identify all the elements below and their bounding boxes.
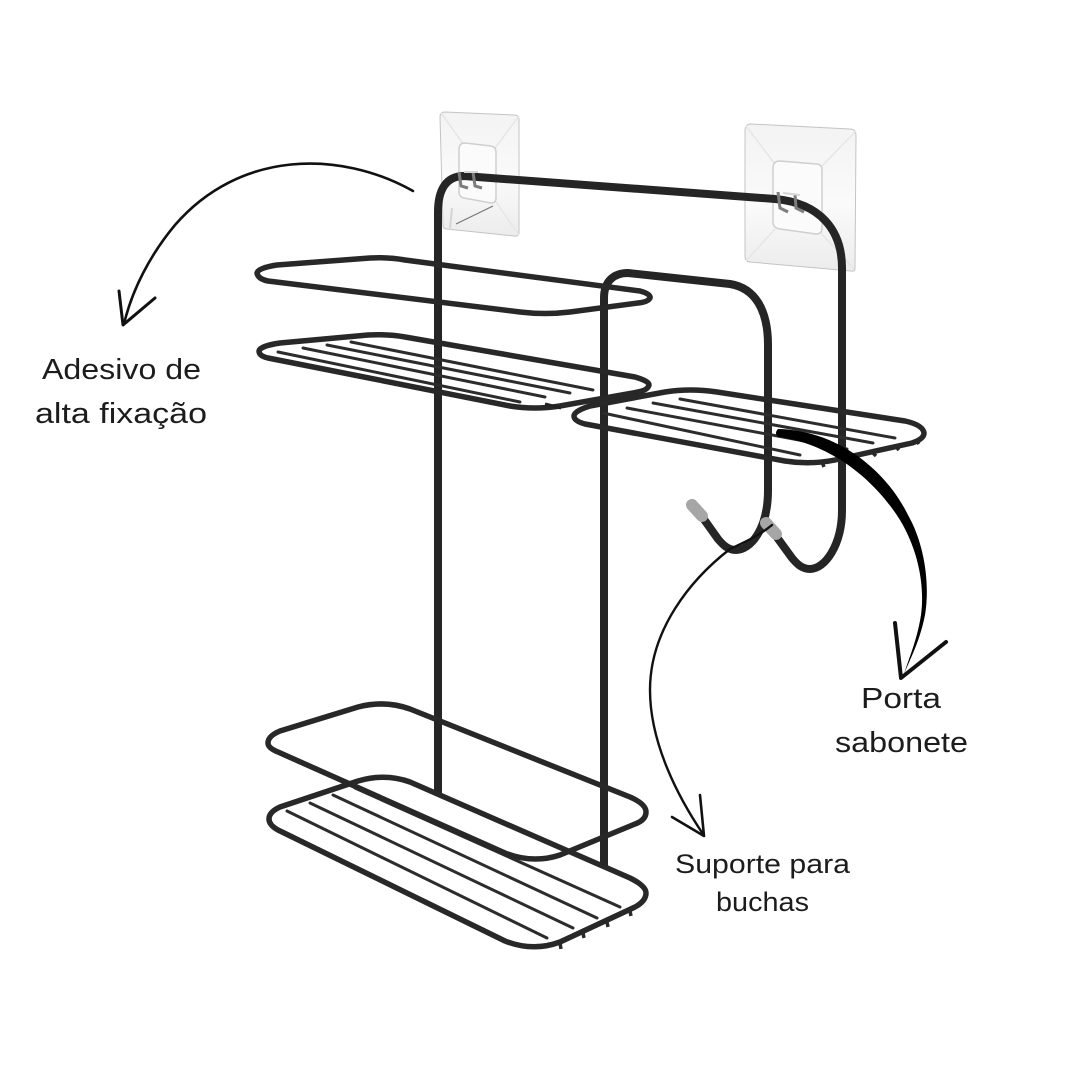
top shelf base frame xyxy=(259,335,649,408)
label: sponge hooks: buchas xyxy=(716,887,809,917)
label: adhesive: alta fixação xyxy=(35,398,207,430)
soap dish wire bars xyxy=(603,399,919,467)
bottom shelf wire bars xyxy=(287,788,631,949)
top shelf wire bars xyxy=(278,342,593,402)
adhesive pad left xyxy=(440,112,519,236)
adhesive pad right xyxy=(745,124,856,271)
soap dish frame xyxy=(574,390,924,463)
label: soap dish: sabonete xyxy=(835,727,968,759)
arrow: adhesive xyxy=(119,164,413,325)
clips on crossbar xyxy=(459,172,804,212)
bottom shelf upper frame xyxy=(268,704,646,859)
label: adhesive: Adesivo de xyxy=(42,354,201,386)
bottom shelf base frame xyxy=(269,777,646,947)
left upright rod with top crossbar and right hook xyxy=(438,176,842,795)
arrow: soap dish xyxy=(776,429,946,678)
top shelf frame xyxy=(257,258,650,314)
hook tips xyxy=(692,505,776,534)
label: soap dish: Porta xyxy=(861,683,942,715)
label: sponge hooks: Suporte para xyxy=(675,849,851,879)
arrow: sponge hooks xyxy=(650,525,772,836)
middle upright rod with front hook xyxy=(604,273,768,866)
